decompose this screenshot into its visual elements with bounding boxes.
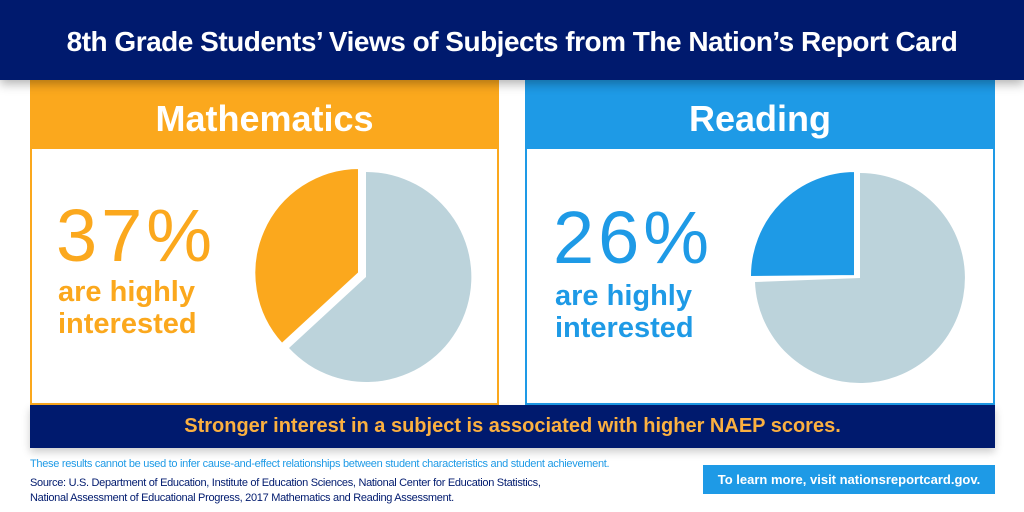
- panel: reading: [525, 80, 995, 405]
- panel: mathematics: [30, 80, 499, 405]
- source text: National Assessment of Educational Progress, 2017 Mathematics and Reading Assessment.: [30, 492, 454, 504]
- text: are highly interested: interested: [555, 312, 694, 344]
- title banner: 8th Grade Students’ Views of Subjects from The Nation’s Report Card: [67, 26, 957, 57]
- callout bar: Stronger interest in a subject is associated with higher NAEP scores.: [184, 415, 841, 437]
- text: are highly interested: are highly: [58, 276, 195, 308]
- title banner: [0, 0, 1024, 80]
- text: are highly interested: [58, 276, 197, 340]
- pie chart: mathematics: [255, 169, 472, 382]
- link button: To learn more, visit nationsreportcard.gov.: [718, 472, 980, 487]
- heading: reading: Reading: [689, 98, 831, 139]
- heading: mathematics: Mathematics: [155, 98, 374, 139]
- heading: mathematics: [30, 82, 499, 149]
- text: are highly interested: [555, 280, 694, 344]
- source text: Source: U.S. Department of Education, Institute of Education Sciences, National Center for Education Statistics,: [30, 477, 541, 489]
- link button: [703, 465, 995, 494]
- stat: 37%: 37%: [56, 194, 216, 277]
- text: are highly interested: are highly: [555, 280, 692, 312]
- callout bar: [30, 405, 995, 448]
- pie chart: reading: [751, 172, 965, 383]
- source text: [30, 477, 541, 504]
- heading: reading: [525, 82, 995, 149]
- stat: 26%: 26%: [553, 196, 713, 279]
- text: are highly interested: interested: [58, 308, 197, 340]
- disclaimer text: These results cannot be used to infer cause-and-effect relationships between student characteristics and student achievement.: [30, 458, 609, 470]
